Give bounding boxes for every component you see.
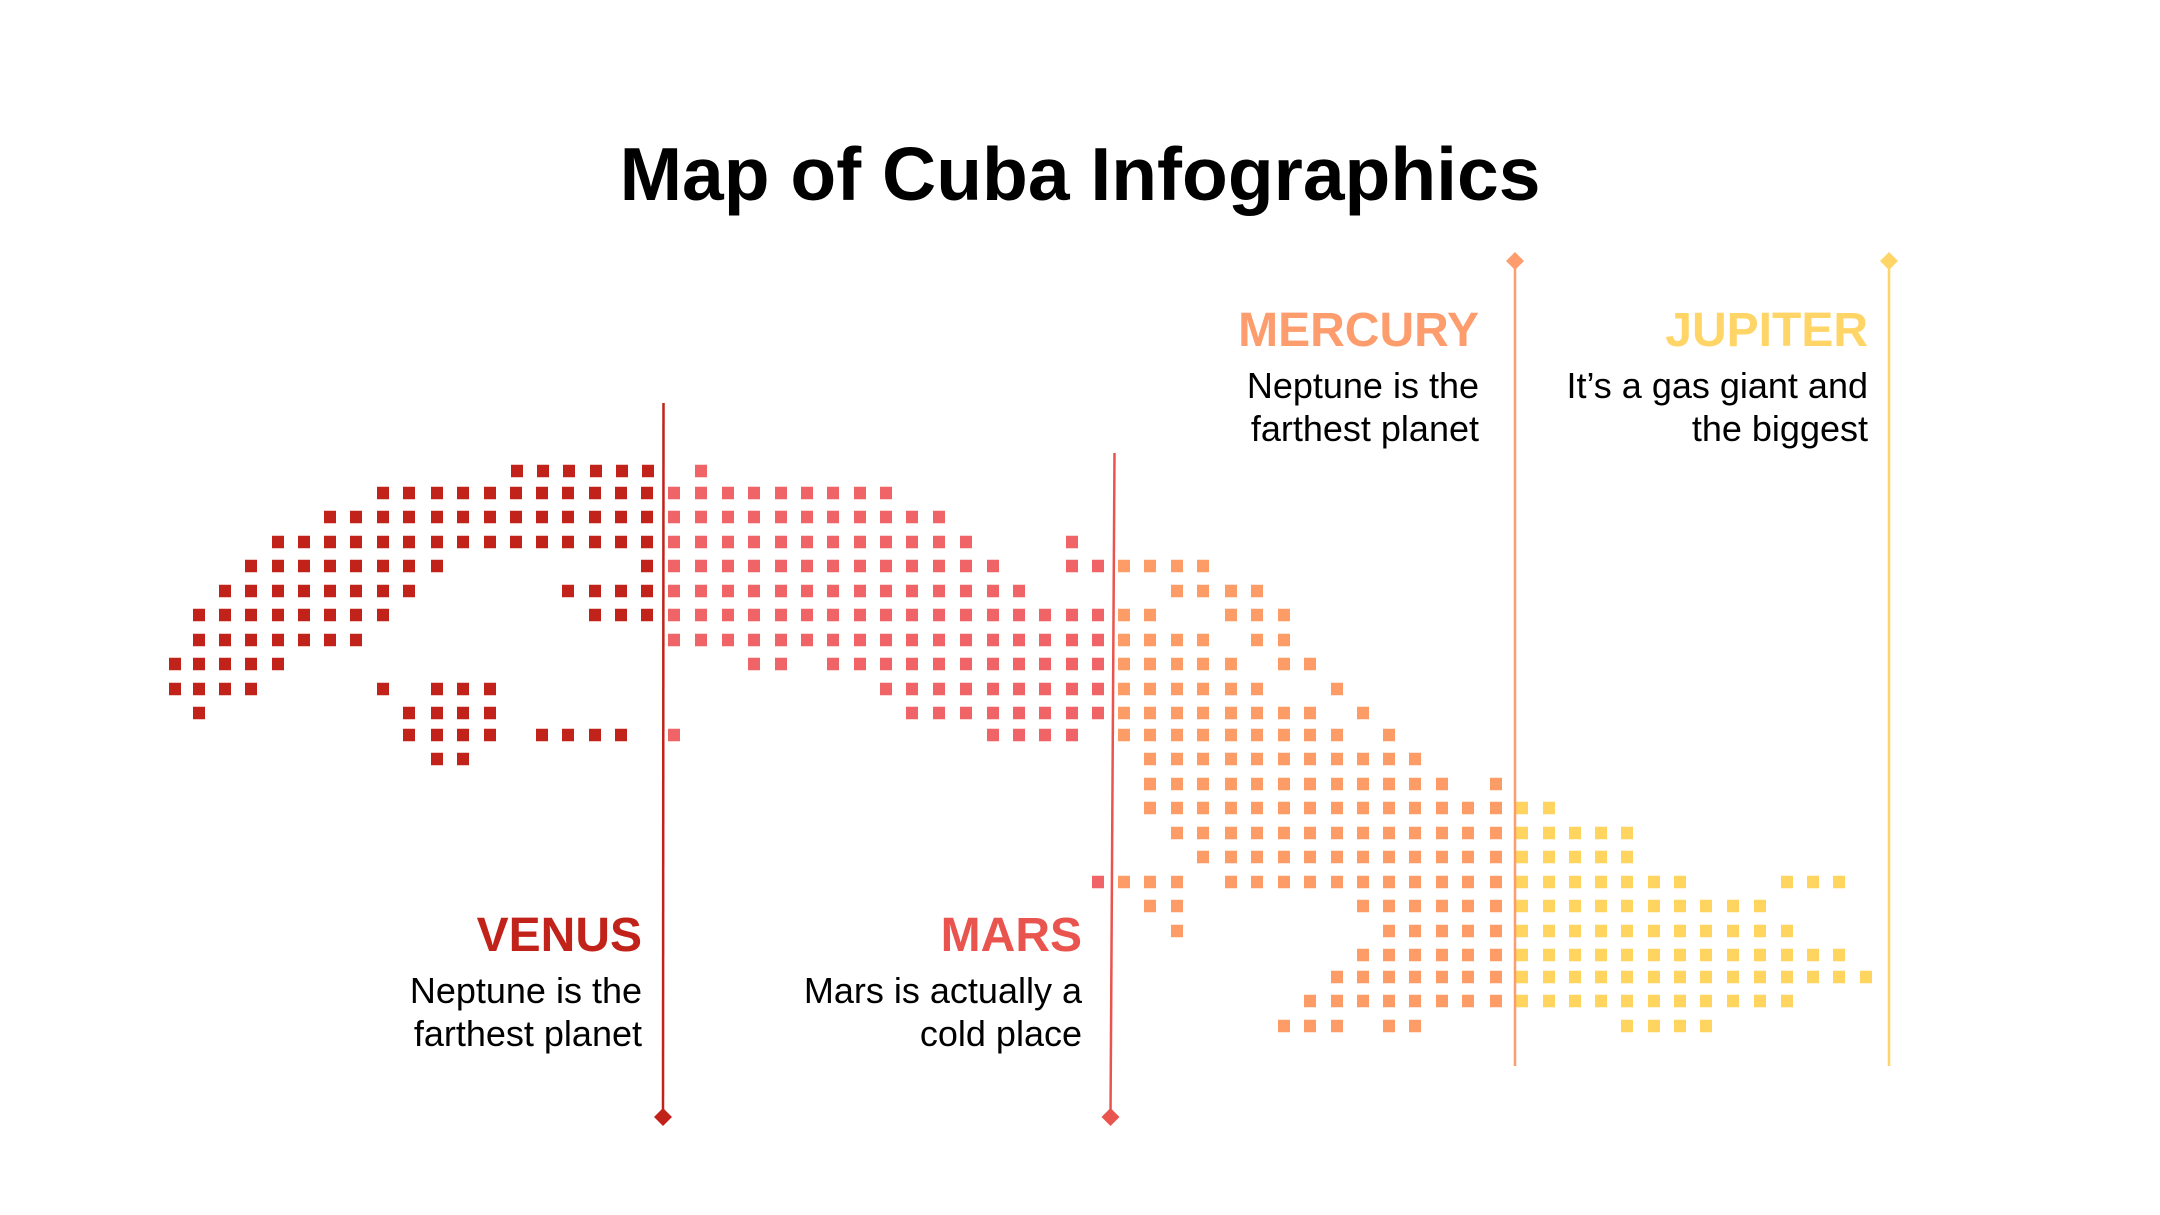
- label: Mars: Mars is actually a: [804, 970, 1083, 1011]
- title: Map of Cuba Infographics: [620, 132, 1540, 216]
- label: Venus: Neptune is the: [410, 970, 642, 1011]
- marker line: Jupiter: [1880, 252, 1898, 1066]
- map of Cuba dot grid: [169, 471, 1872, 1026]
- map region: Venus dark red dots: [169, 471, 654, 759]
- label: Mars: [804, 909, 1083, 1054]
- label: Mercury: farthest planet: [1251, 408, 1479, 449]
- map region: Jupiter yellow dots: [1516, 808, 1872, 1026]
- label: Venus: farthest planet: [414, 1013, 642, 1054]
- label: Mercury: [1238, 304, 1479, 449]
- label: Venus: [410, 909, 642, 1054]
- label: Mercury: Neptune is the: [1247, 365, 1479, 406]
- label: Mars: cold place: [920, 1013, 1082, 1054]
- label: Jupiter: [1566, 304, 1868, 449]
- label: Mercury: MERCURY: [1238, 304, 1479, 357]
- label: Venus: VENUS: [477, 909, 642, 962]
- marker line: Mars: [1102, 453, 1120, 1126]
- map region: Mars coral dots: [668, 471, 1104, 882]
- label: Mars: MARS: [941, 909, 1082, 962]
- marker line: Mercury: [1506, 252, 1524, 1066]
- marker line: Venus: [654, 403, 672, 1126]
- label: Jupiter: It’s a gas giant and: [1566, 365, 1868, 406]
- label: Jupiter: JUPITER: [1665, 304, 1868, 357]
- map region: Mercury orange dots: [1118, 566, 1502, 1026]
- label: Jupiter: the biggest: [1692, 408, 1868, 449]
